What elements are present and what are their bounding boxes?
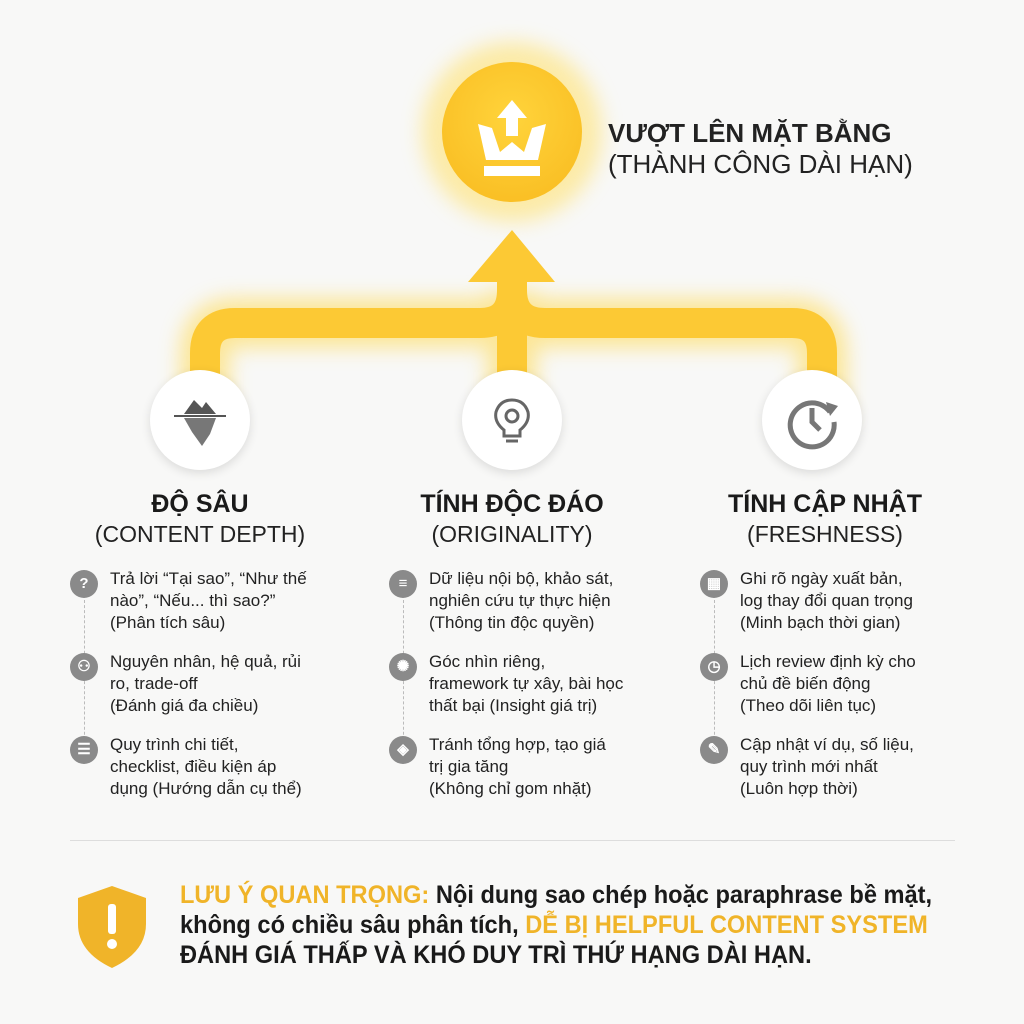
- list: depth: Quy trình chi tiết,: [110, 735, 238, 754]
- list: originality: framework tự xây, bài học: [429, 674, 623, 693]
- title: (THÀNH CÔNG DÀI HẠN): [608, 149, 913, 179]
- list: depth: ?: [79, 575, 89, 592]
- list: depth: checklist, điều kiện áp: [110, 757, 276, 776]
- list: originality: nghiên cứu tự thực hiện: [429, 591, 611, 610]
- list: depth: Trả lời “Tại sao”, “Như thế: [110, 569, 307, 588]
- list: originality: ✺: [397, 658, 409, 675]
- heading: freshness: TÍNH CẬP NHẬT: [728, 490, 922, 518]
- list: freshness: ✎: [708, 741, 720, 758]
- text: (FRESHNESS): [747, 521, 903, 547]
- list: freshness: (Luôn hợp thời): [740, 779, 858, 798]
- callout: important note: LƯU Ý QUAN TRỌNG: Nội dung sao chép hoặc paraphrase bề mặt,: [180, 881, 932, 909]
- list: freshness: log thay đổi quan trọng: [740, 591, 913, 610]
- callout: important note: không có chiều sâu phân tích, DỄ BỊ HELPFUL CONTENT SYSTEM: [180, 911, 928, 939]
- list: freshness: Lịch review định kỳ cho: [740, 652, 916, 671]
- icon: clock refresh: [762, 370, 862, 470]
- text: (CONTENT DEPTH): [95, 521, 305, 547]
- list: depth: ⚇: [77, 658, 91, 675]
- list: originality: trị gia tăng: [429, 757, 508, 776]
- list: depth: Nguyên nhân, hệ quả, rủi: [110, 652, 301, 671]
- list: freshness: (Minh bạch thời gian): [740, 613, 900, 632]
- list: freshness: Cập nhật ví dụ, số liệu,: [740, 735, 914, 754]
- arrow diagram: [166, 30, 860, 404]
- list: originality: ≡: [399, 575, 407, 592]
- list: originality: Góc nhìn riêng,: [429, 652, 545, 671]
- list: depth: nào”, “Nếu... thì sao?”: [110, 591, 275, 610]
- list: originality: Tránh tổng hợp, tạo giá: [429, 735, 606, 754]
- list: freshness: quy trình mới nhất: [740, 757, 878, 776]
- list: originality: thất bại (Insight giá trị): [429, 696, 597, 715]
- list: originality: ◈: [397, 741, 409, 758]
- callout: important note: [180, 880, 932, 969]
- list: freshness: Ghi rõ ngày xuất bản,: [740, 569, 903, 588]
- list: freshness: ◷: [707, 658, 721, 675]
- icon: iceberg: [150, 370, 250, 470]
- list: freshness: [700, 569, 916, 798]
- title: VƯỢT LÊN MẶT BẰNG: [608, 118, 892, 148]
- title: [608, 118, 913, 179]
- text: (ORIGINALITY): [431, 521, 592, 547]
- list: depth: ☰: [77, 741, 91, 758]
- heading: depth: ĐỘ SÂU: [151, 490, 249, 518]
- list: depth: ro, trade-off: [110, 674, 198, 693]
- icon: shield warning: [78, 886, 146, 968]
- list: originality: Dữ liệu nội bộ, khảo sát,: [429, 569, 613, 588]
- heading: originality: TÍNH ĐỘC ĐÁO: [420, 490, 604, 518]
- icon: crown circle: [442, 62, 582, 202]
- icon: bulb gear: [462, 370, 562, 470]
- list: depth: dụng (Hướng dẫn cụ thể): [110, 779, 302, 798]
- list: freshness: ▦: [707, 575, 721, 592]
- list: originality: (Không chỉ gom nhặt): [429, 779, 592, 798]
- list: freshness: (Theo dõi liên tục): [740, 696, 876, 715]
- list: freshness: chủ đề biến động: [740, 674, 870, 693]
- list: depth: [70, 569, 307, 798]
- list: originality: [389, 569, 623, 798]
- list: originality: (Thông tin độc quyền): [429, 613, 594, 632]
- list: depth: (Phân tích sâu): [110, 613, 225, 632]
- callout: important note: ĐÁNH GIÁ THẤP VÀ KHÓ DUY TRÌ THỨ HẠNG DÀI HẠN.: [180, 941, 812, 969]
- list: depth: (Đánh giá đa chiều): [110, 696, 258, 715]
